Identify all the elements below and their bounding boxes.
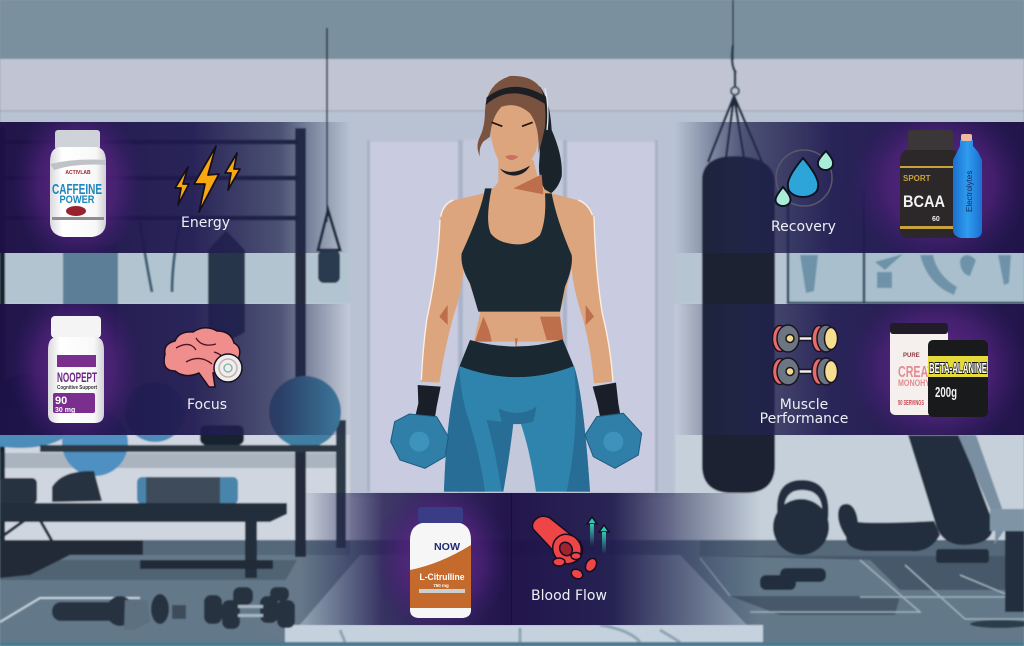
icon: lightning bolts	[175, 146, 240, 212]
panel: muscle performance	[680, 304, 1024, 435]
icon: blood vessel with arrows	[532, 516, 609, 581]
label: muscle performance: Performance	[760, 411, 848, 427]
product: BCAA jar and electrolytes drink: SPORT	[903, 174, 931, 183]
panel: energy	[0, 122, 345, 253]
product: creatine and beta-alanine jars: MONOHY	[898, 378, 930, 388]
product: creatine and beta-alanine jars: PURE	[903, 353, 920, 359]
product: noopept bottle	[48, 316, 104, 423]
product: caffeine power bottle	[50, 130, 106, 237]
label: recovery: Recovery	[771, 219, 836, 235]
wrist wraps	[415, 383, 621, 417]
product: L-citrulline bottle: NOW	[434, 542, 461, 553]
sports top	[461, 188, 572, 312]
central figure: woman holding dumbbells	[391, 76, 642, 492]
product: L-citrulline bottle: 750 mg	[433, 583, 449, 588]
hair and face	[491, 103, 539, 175]
icon: dumbbells	[772, 325, 838, 385]
panel: focus	[0, 304, 345, 435]
product: BCAA jar and electrolytes drink: Electrolytes	[965, 171, 974, 212]
leggings	[444, 366, 590, 492]
product: noopept bottle: 90	[55, 395, 67, 407]
product: creatine and beta-alanine jars: CREAT	[898, 364, 934, 381]
product: L-citrulline bottle	[410, 507, 471, 618]
product: noopept bottle: 30 mg	[55, 407, 75, 414]
product: noopept bottle: Cognitive Support	[57, 385, 97, 391]
product: creatine and beta-alanine jars	[890, 323, 988, 417]
label: blood flow: Blood Flow	[531, 588, 607, 604]
label: muscle performance: Muscle	[780, 397, 828, 413]
icon: brain with target	[164, 328, 242, 387]
arms and torso	[421, 153, 613, 383]
dumbbells	[391, 414, 448, 468]
product: noopept bottle: NOOPEPT	[57, 369, 97, 385]
product: caffeine power bottle: POWER	[60, 194, 95, 206]
panel: recovery	[680, 122, 1024, 253]
product: BCAA jar and electrolytes drink	[900, 130, 982, 238]
product: creatine and beta-alanine jars: 200g	[935, 384, 957, 401]
product: BCAA jar and electrolytes drink: BCAA	[903, 192, 945, 211]
waistband	[459, 339, 574, 377]
panel: blood flow	[306, 493, 752, 625]
ponytail	[538, 87, 562, 195]
product: creatine and beta-alanine jars: 50 SERVINGS	[898, 400, 924, 407]
product: caffeine power bottle: ACTIVLAB	[65, 170, 91, 176]
label: energy: Energy	[181, 215, 230, 231]
product: L-citrulline bottle: L-Citrulline	[420, 572, 464, 582]
product: BCAA jar and electrolytes drink: 60	[932, 216, 940, 223]
icon: water drops	[776, 150, 833, 206]
label: focus: Focus	[187, 397, 227, 413]
product: caffeine power bottle: CAFFEINE	[52, 181, 102, 198]
